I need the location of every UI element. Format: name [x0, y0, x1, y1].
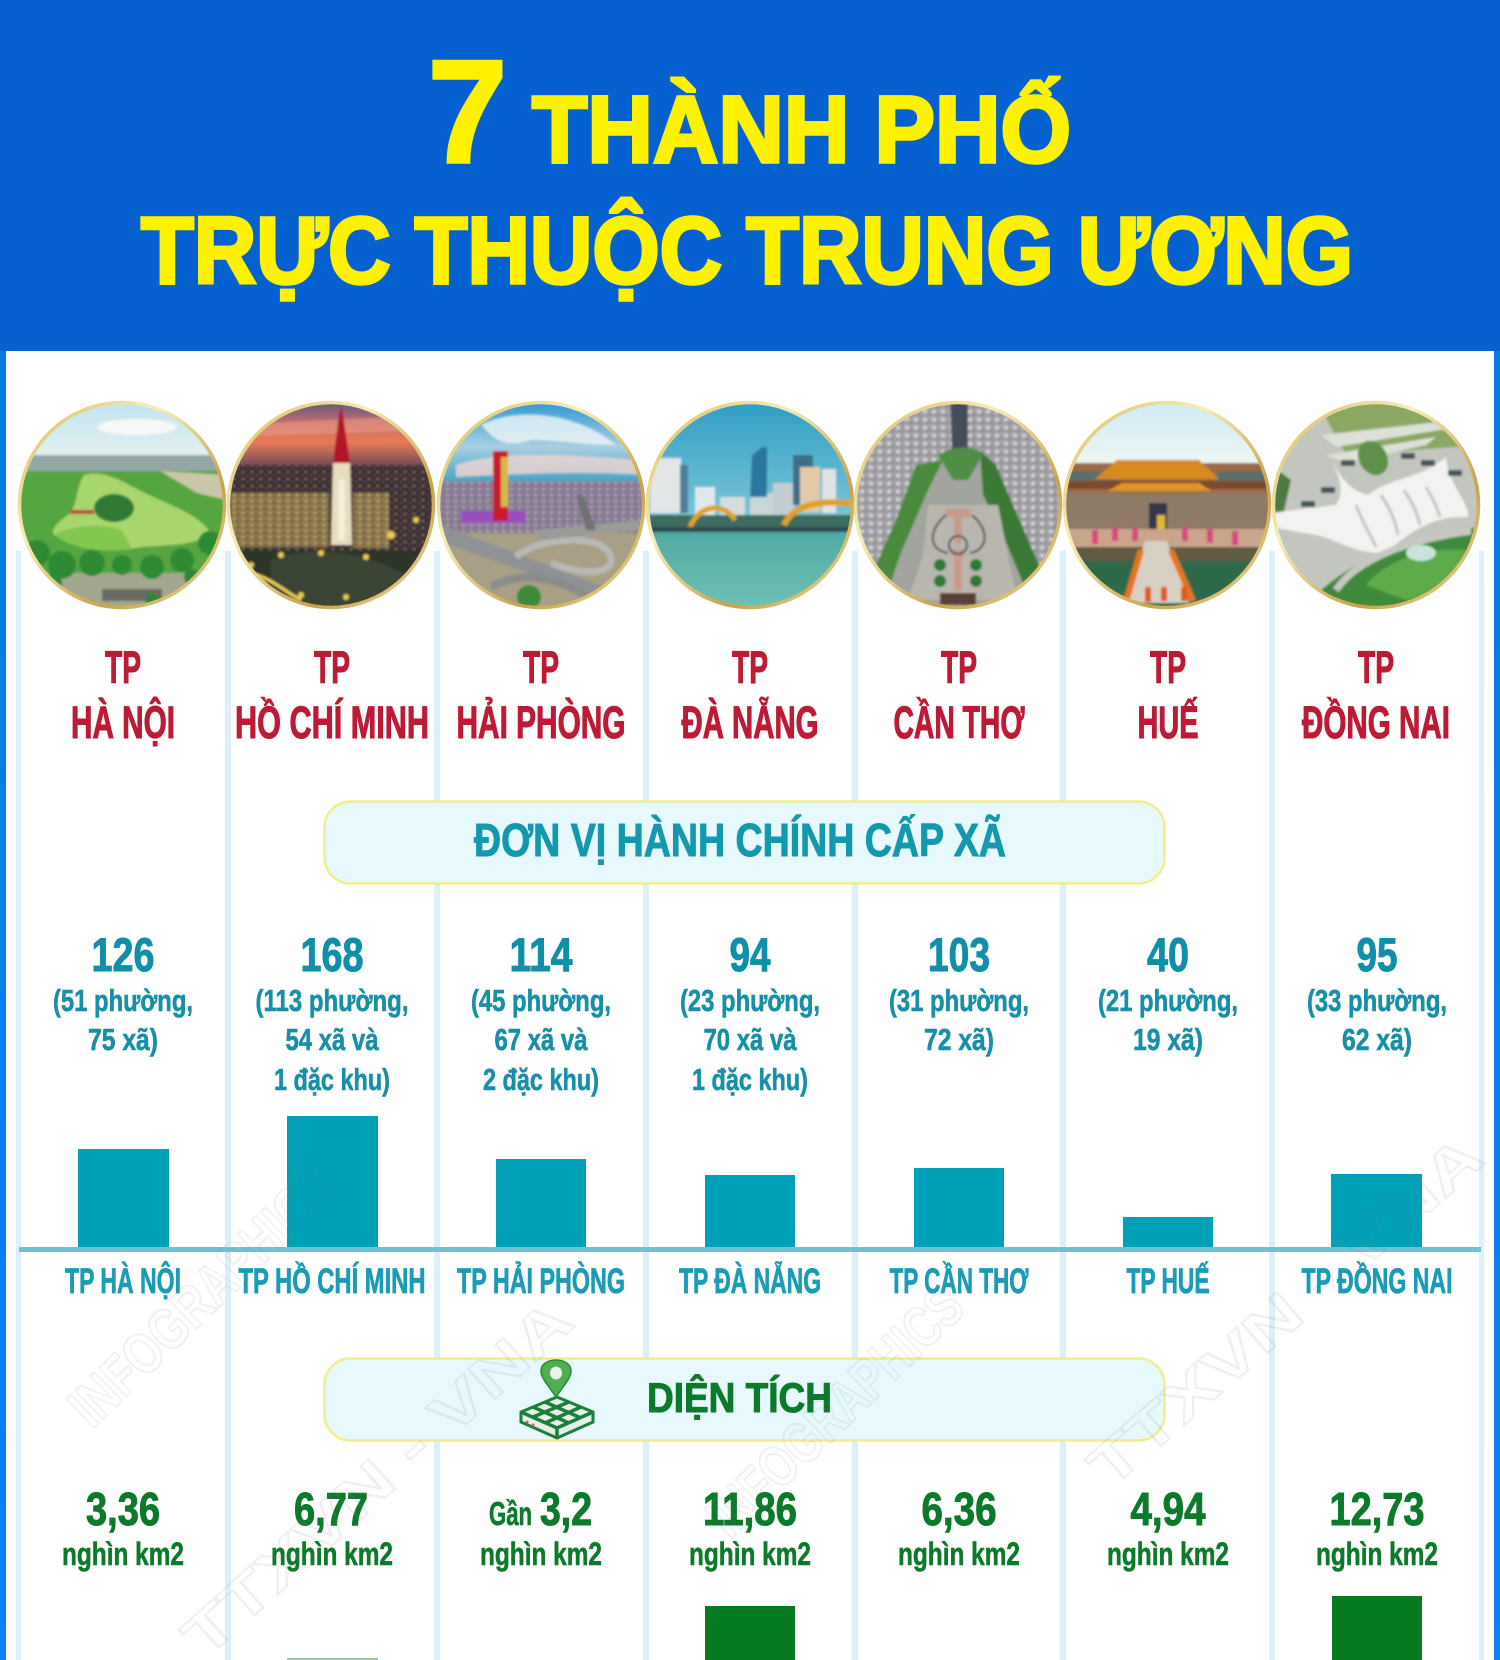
- area: Đà Nẵng: nghìn km2: [689, 1536, 811, 1572]
- count: Hải Phòng: [471, 928, 611, 1097]
- area: Hà Nội: 3,36: [86, 1483, 160, 1535]
- area: Huế: [1107, 1483, 1229, 1572]
- count: Đồng Nai: 62 xã): [1342, 1022, 1412, 1057]
- photo: Hải Phòng, tower and interchange: [436, 400, 646, 613]
- area: Hồ Chí Minh: nghìn km2: [271, 1536, 393, 1572]
- area: Đồng Nai: nghìn km2: [1316, 1536, 1438, 1572]
- city: Hải Phòng: TP: [523, 642, 559, 693]
- bar chart: commune counts: TP HUẾ: [1126, 1261, 1210, 1301]
- city: Cần Thơ: TP: [941, 642, 977, 693]
- count: Hồ Chí Minh: 1 đặc khu): [274, 1062, 390, 1097]
- count: Hải Phòng: (45 phường,: [471, 983, 611, 1018]
- city: Hà Nội: HÀ NỘI: [71, 697, 175, 748]
- count: Hà Nội: (51 phường,: [53, 983, 193, 1018]
- section heading: area: [324, 1358, 1164, 1440]
- count: Hồ Chí Minh: 54 xã và: [286, 1022, 379, 1057]
- area: Hồ Chí Minh: [271, 1483, 393, 1572]
- bar chart: commune counts: [19, 1116, 1481, 1301]
- area: Hà Nội: [62, 1483, 184, 1572]
- count: Đà Nẵng: 70 xã và: [704, 1022, 797, 1057]
- area: Hải Phòng: 3,2: [540, 1483, 592, 1535]
- title: [141, 30, 1353, 304]
- count: Cần Thơ: 103: [928, 928, 990, 981]
- count: Đồng Nai: [1307, 928, 1447, 1057]
- area: Hải Phòng: Gần: [489, 1495, 532, 1532]
- city: Đà Nẵng: ĐÀ NẴNG: [682, 697, 818, 748]
- count: Đà Nẵng: 1 đặc khu): [692, 1062, 808, 1097]
- photo: Đà Nẵng, Dragon Bridge and Han river: [645, 400, 855, 616]
- bar chart: area (cropped at page bottom): [287, 1596, 1422, 1660]
- section heading: administrative units: [324, 802, 1164, 884]
- area: Huế: nghìn km2: [1107, 1536, 1229, 1572]
- city: Hà Nội: TP: [105, 642, 141, 693]
- bar chart: commune counts: TP CẦN THƠ: [890, 1261, 1029, 1301]
- photo: Hồ Chí Minh, Landmark 81 at dusk: [226, 400, 436, 615]
- count: Hải Phòng: 67 xã và: [494, 1022, 588, 1057]
- title: TRỰC THUỘC TRUNG ƯƠNG: [141, 198, 1353, 304]
- area: Cần Thơ: nghìn km2: [898, 1536, 1020, 1572]
- city: Hải Phòng: [456, 642, 626, 748]
- column dividers: [16, 551, 1484, 1660]
- photo: Cần Thơ, aerial square: [853, 400, 1063, 610]
- city: Huế: HUẾ: [1138, 697, 1198, 748]
- bar chart: commune counts: TP HẢI PHÒNG: [457, 1261, 625, 1301]
- city: Đồng Nai: TP: [1358, 642, 1394, 693]
- city: Huế: [1138, 642, 1198, 748]
- photo: Huế, Ngọ Môn gate: [1062, 400, 1272, 616]
- count: Đồng Nai: 95: [1356, 928, 1398, 981]
- city: Cần Thơ: CẦN THƠ: [894, 697, 1025, 748]
- area: Đồng Nai: [1316, 1483, 1438, 1572]
- city: Hồ Chí Minh: HỒ CHÍ MINH: [235, 697, 429, 748]
- count: Đà Nẵng: (23 phường,: [680, 983, 820, 1018]
- city: Hải Phòng: HẢI PHÒNG: [456, 697, 626, 748]
- area: Cần Thơ: [898, 1483, 1020, 1572]
- title: THÀNH PHỐ: [532, 77, 1071, 183]
- icon: map pin on land grid: [521, 1360, 593, 1438]
- count: Đà Nẵng: 94: [730, 928, 770, 981]
- area: Hải Phòng: [480, 1483, 602, 1572]
- area: Đà Nẵng: 11,86: [703, 1483, 797, 1535]
- count: Hồ Chí Minh: 168: [300, 928, 364, 981]
- count: Cần Thơ: (31 phường,: [889, 983, 1029, 1018]
- title: 7: [428, 30, 507, 193]
- area: Hải Phòng: nghìn km2: [480, 1536, 602, 1572]
- area: Hồ Chí Minh: 6,77: [294, 1483, 368, 1535]
- city: Đà Nẵng: [682, 642, 818, 748]
- area: Đồng Nai: 12,73: [1330, 1483, 1424, 1535]
- section heading: area: DIỆN TÍCH: [647, 1373, 832, 1421]
- count: Hồ Chí Minh: [256, 928, 408, 1097]
- city names: [71, 642, 1450, 748]
- count: Huế: [1098, 928, 1238, 1057]
- bar chart: commune counts: TP HỒ CHÍ MINH: [238, 1261, 426, 1301]
- area: Hà Nội: nghìn km2: [62, 1536, 184, 1572]
- section heading: administrative units: ĐƠN VỊ HÀNH CHÍNH CẤP XÃ: [474, 814, 1006, 866]
- count: Huế: (21 phường,: [1098, 983, 1238, 1018]
- watermarks: [56, 1123, 1496, 1660]
- city: Đồng Nai: [1302, 642, 1450, 748]
- header band: [0, 0, 1500, 351]
- city: Hà Nội: [71, 642, 175, 748]
- count: Cần Thơ: [889, 928, 1029, 1057]
- count: Đà Nẵng: [680, 928, 820, 1097]
- count: Hải Phòng: 2 đặc khu): [483, 1062, 599, 1097]
- photo: Đồng Nai, Long Thành airport: [1271, 400, 1481, 610]
- photo: Hà Nội, Hoàn Kiếm lake: [17, 400, 227, 615]
- city: Hồ Chí Minh: [235, 642, 429, 748]
- watermarks: INFOGRAPHICS: [56, 1153, 349, 1439]
- count: Huế: 19 xã): [1133, 1022, 1203, 1057]
- area: Đà Nẵng: [689, 1483, 811, 1572]
- count: Hà Nội: 126: [92, 928, 154, 981]
- count: Huế: 40: [1147, 928, 1189, 981]
- bar chart: commune counts: TP HÀ NỘI: [65, 1261, 181, 1301]
- watermarks: TTXVN - VNA: [1076, 1123, 1496, 1500]
- count: Đồng Nai: (33 phường,: [1307, 983, 1447, 1018]
- commune counts: [53, 928, 1447, 1097]
- city: Huế: TP: [1150, 642, 1186, 693]
- count: Hải Phòng: 114: [510, 928, 572, 981]
- count: Hà Nội: [53, 928, 193, 1057]
- city: Cần Thơ: [894, 642, 1025, 748]
- area figures: [62, 1483, 1438, 1572]
- area: Cần Thơ: 6,36: [922, 1483, 996, 1535]
- area: Huế: 4,94: [1130, 1483, 1206, 1535]
- count: Hồ Chí Minh: (113 phường,: [256, 983, 408, 1018]
- count: Cần Thơ: 72 xã): [924, 1022, 994, 1057]
- city: Đà Nẵng: TP: [732, 642, 768, 693]
- bar chart: commune counts: TP ĐÀ NẴNG: [679, 1261, 821, 1301]
- count: Hà Nội: 75 xã): [88, 1022, 158, 1057]
- watermarks: INFOGRAPHICS: [694, 1273, 976, 1549]
- city: Hồ Chí Minh: TP: [314, 642, 350, 693]
